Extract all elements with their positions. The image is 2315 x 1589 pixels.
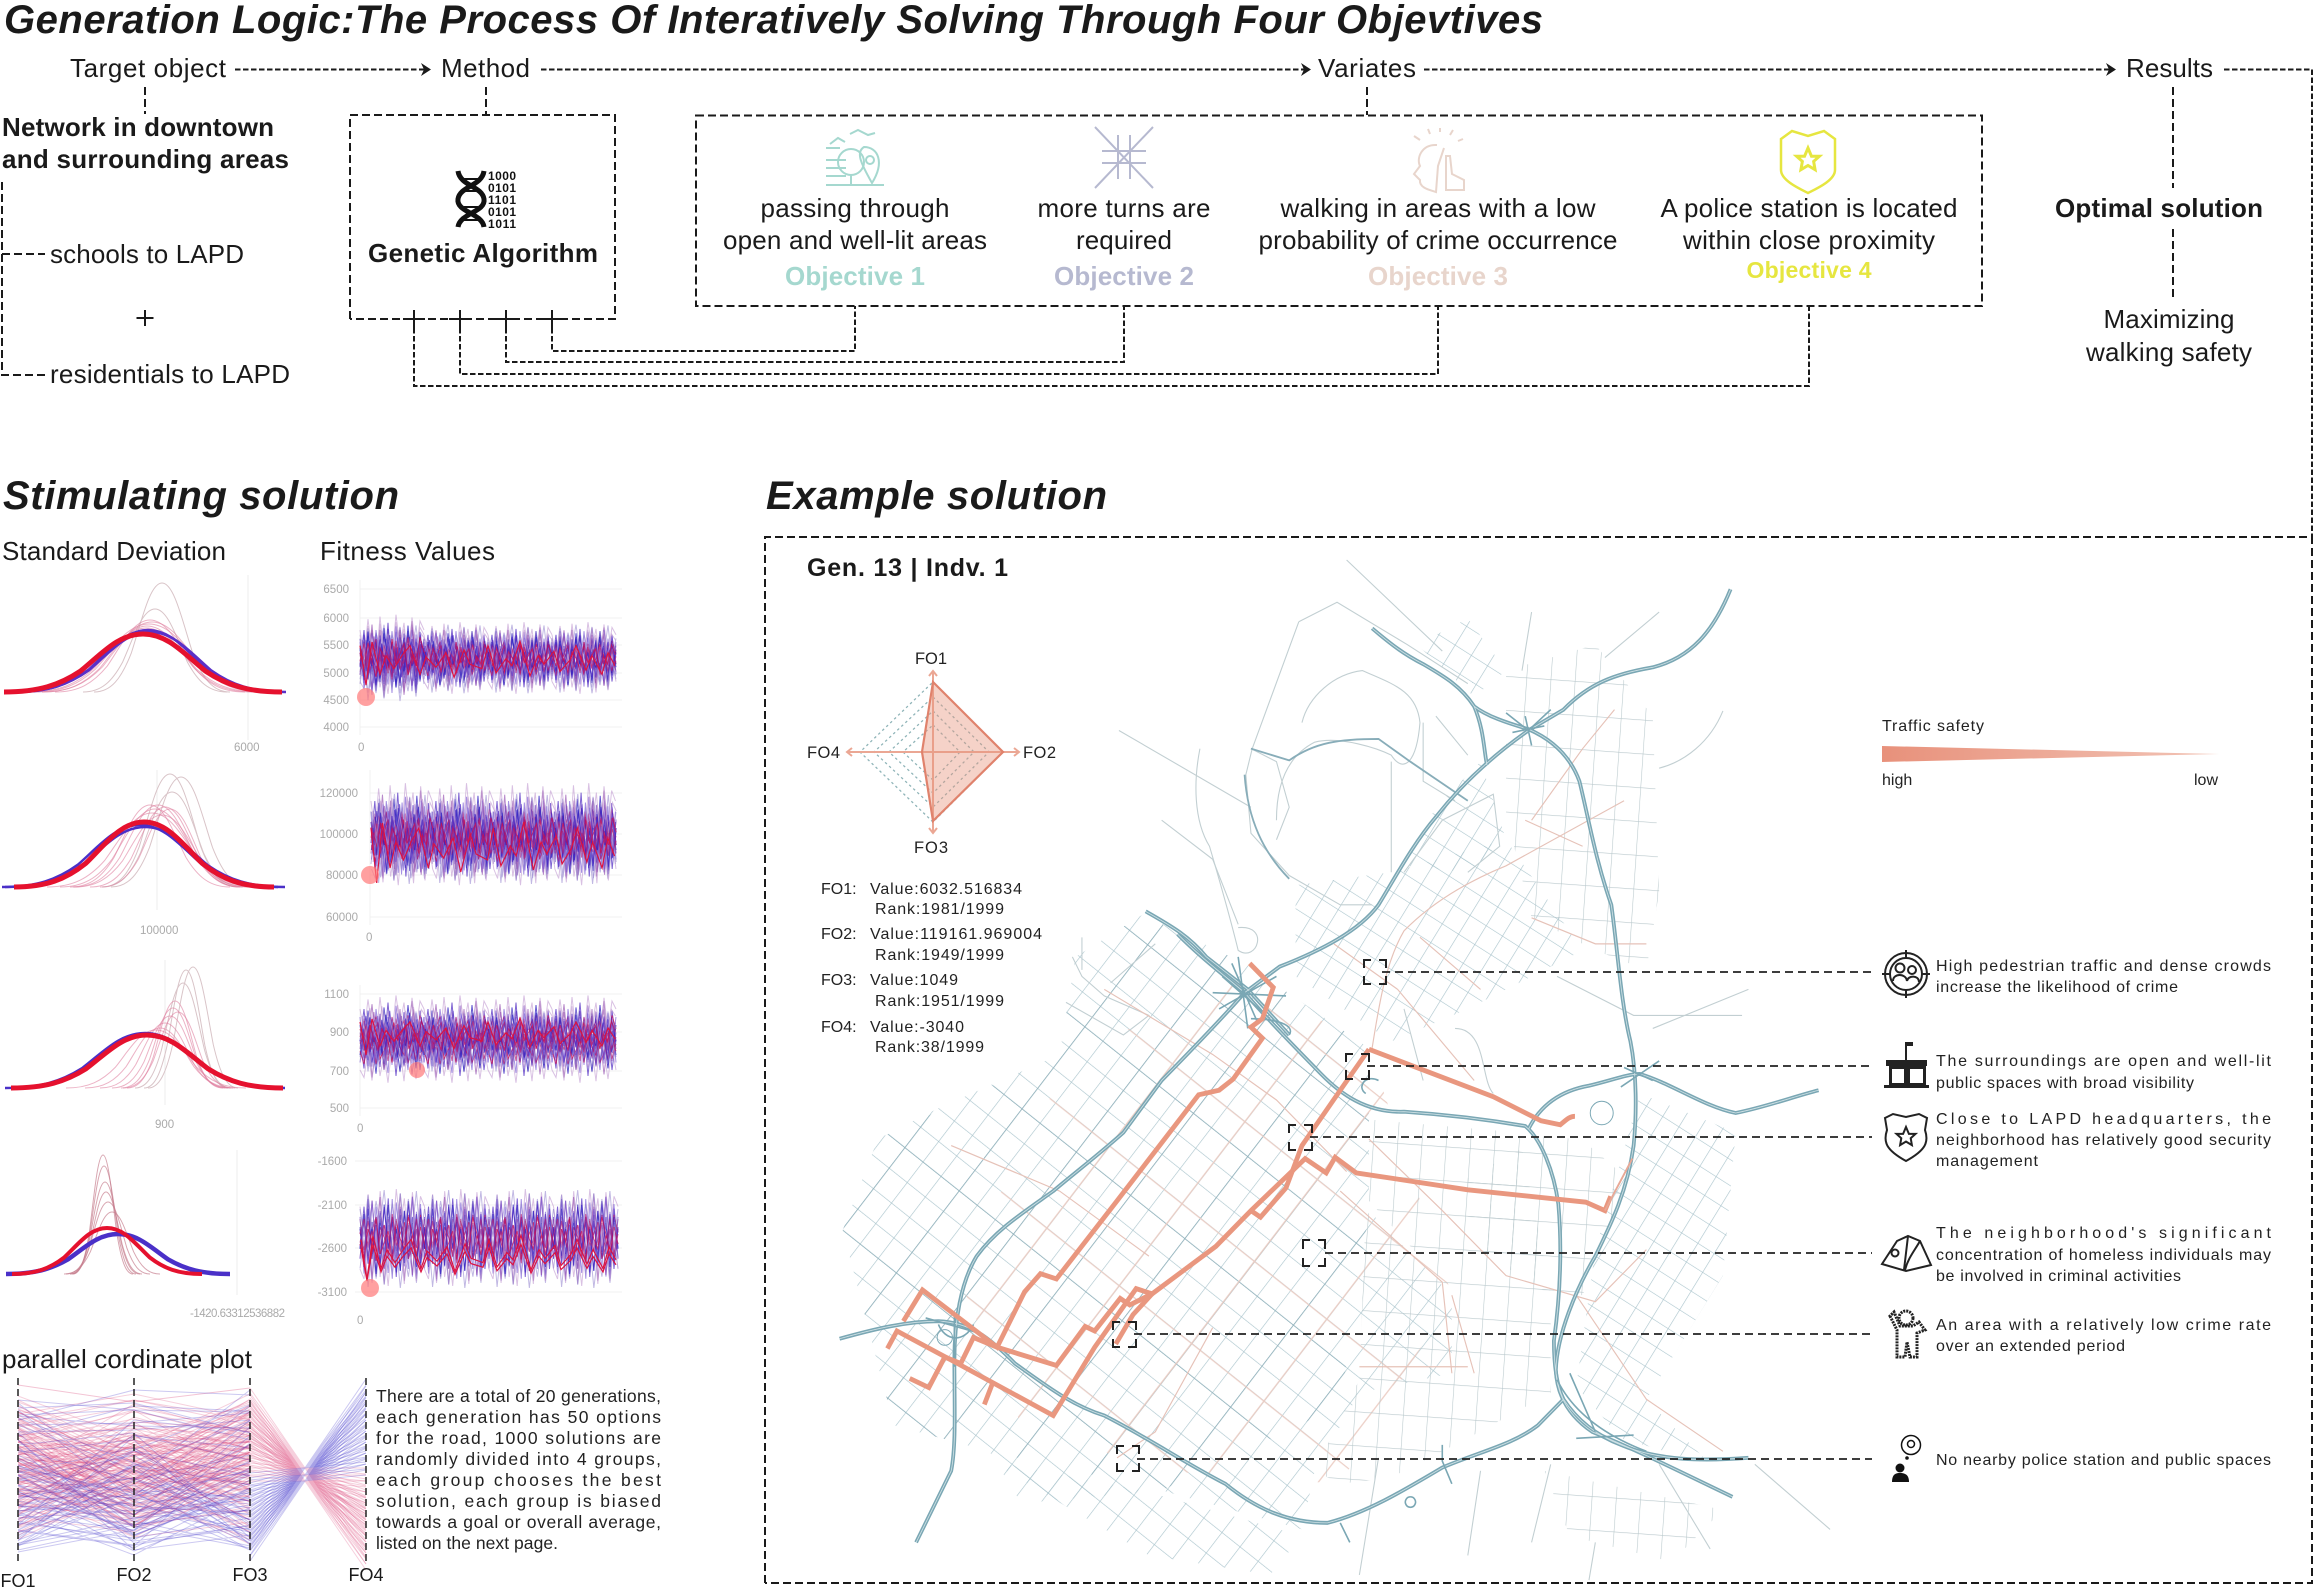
optimal solution: Optimal solution	[2055, 193, 2263, 223]
chart: fitness FO1	[323, 580, 667, 754]
chart: fitness FO3: 900	[330, 1027, 349, 1039]
radar axes	[847, 671, 1019, 833]
radar values: Rank:1949/1999	[875, 947, 1004, 964]
chart: fitness FO1: 0	[358, 742, 364, 754]
chart: fitness FO3: 700	[330, 1066, 349, 1078]
chart: fitness FO1: 4000	[323, 722, 349, 734]
goal text: Maximizing	[2104, 304, 2234, 334]
annotation 6: no police	[1892, 1436, 2271, 1482]
heading: stimulating solution: Stimulating solution	[3, 474, 399, 518]
step label: target object: Target object	[70, 53, 227, 83]
annotation 5: low crime	[1890, 1311, 2271, 1357]
radar chart	[807, 650, 1056, 857]
marker 3	[1289, 1125, 1872, 1150]
marker 6	[1117, 1446, 1872, 1471]
annotation 3: police: management	[1936, 1153, 2039, 1170]
marker 1	[1364, 960, 1872, 984]
radar polygon	[922, 682, 1003, 821]
annotation 1: crowds: High pedestrian traffic and dense crowds	[1936, 958, 2271, 975]
chart: fitness FO2	[320, 770, 667, 944]
chart: standard deviation FO3: 900	[155, 1119, 174, 1131]
objective 2: Objective 2	[1054, 261, 1194, 291]
radar grid	[860, 682, 1003, 822]
radar labels	[807, 650, 1056, 857]
radar values: Rank:1951/1999	[875, 993, 1004, 1010]
subheading: fitness values: Fitness Values	[320, 536, 495, 566]
annotation 4: homeless: concentration of homeless individuals may	[1936, 1247, 2271, 1264]
annotation 3: police: Close to LAPD headquarters, the	[1936, 1111, 2271, 1128]
annotation 4: homeless	[1882, 1225, 2272, 1285]
route: residentials: residentials to LAPD	[50, 359, 290, 389]
text block: generations note	[376, 1386, 661, 1553]
annotation 3: police	[1885, 1111, 2271, 1170]
connectors to objectives	[403, 306, 1809, 386]
objective 1: passing through	[760, 193, 950, 223]
legend: traffic safety	[1882, 718, 2219, 789]
context roads north	[1066, 560, 1830, 1580]
plus sign	[136, 310, 154, 326]
annotation 4: homeless: be involved in criminal activities	[1936, 1268, 2181, 1285]
legend: traffic safety: high	[1882, 772, 1912, 789]
text block: generations note: each group chooses the best	[376, 1470, 661, 1490]
icon: DNA binary	[458, 169, 516, 231]
chart: standard deviation FO1	[4, 575, 286, 754]
radar values: FO4:	[821, 1019, 857, 1036]
objective 1: Objective 1	[785, 261, 925, 291]
result connector line	[2224, 70, 2312, 537]
icon: DNA binary: 1011	[488, 217, 516, 231]
radar values: FO3:	[821, 972, 857, 989]
radar values: Value:119161.969004	[870, 926, 1042, 943]
icon: person waving	[1890, 1311, 1925, 1357]
chart: fitness FO4: -3100	[318, 1287, 347, 1299]
marker 4	[1303, 1240, 1872, 1266]
legend wedge	[1882, 746, 2219, 762]
chart: fitness FO4: 0	[357, 1315, 363, 1327]
goal text: walking safety	[2085, 337, 2252, 367]
icon: police badge	[1885, 1114, 1927, 1161]
annotation 1: crowds	[1882, 950, 2271, 998]
teal park road	[1245, 739, 1468, 879]
callout markers and leaders	[1113, 960, 1872, 1471]
panel: example solution frame	[765, 537, 2312, 1583]
panel: variates objectives	[696, 87, 1982, 306]
heading: parallel coordinate plot: parallel cordinate plot	[2, 1344, 253, 1374]
objective 3	[1258, 128, 1618, 291]
pink secondary roads	[951, 710, 1723, 1458]
radar labels: FO3	[914, 839, 948, 857]
target heading: and surrounding areas	[2, 144, 289, 174]
icon: open park	[826, 130, 884, 185]
radar values: Value:-3040	[870, 1019, 964, 1036]
chart: fitness FO2: 0	[366, 932, 372, 944]
route: schools: schools to LAPD	[50, 239, 244, 269]
chart: fitness FO3: 0	[357, 1123, 363, 1135]
optimal route	[887, 963, 1611, 1416]
solution label: Gen. 13 | Indv. 1	[807, 554, 1008, 582]
radar labels: FO1	[915, 650, 947, 668]
panel: genetic algorithm	[350, 87, 1809, 386]
annotation 2: open space	[1884, 1042, 2272, 1092]
objective 1	[723, 130, 987, 291]
icon: police shield	[1781, 131, 1835, 193]
icon: DNA binary: 1000	[488, 169, 516, 183]
chart: fitness FO4	[318, 1156, 667, 1327]
step label: method: Method	[441, 53, 530, 83]
objective 4: A police station is located	[1660, 193, 1958, 223]
interchange detail	[926, 710, 1659, 1542]
chart: parallel coordinates	[0, 1378, 384, 1589]
target heading	[2, 112, 289, 174]
process flow header	[70, 53, 2213, 83]
objective 3: walking in areas with a low	[1280, 193, 1596, 223]
map	[840, 560, 1830, 1580]
axis labels: FO2	[116, 1565, 152, 1585]
annotation 6: no police: No nearby police station and public spaces	[1936, 1452, 2271, 1469]
annotation 1: crowds: increase the likelihood of crime	[1936, 979, 2178, 996]
annotation 2: open space: public spaces with broad visibility	[1936, 1075, 2194, 1092]
text block: generations note: solution, each group is biased	[376, 1491, 661, 1511]
radar values: Value:1049	[870, 972, 958, 989]
objective 2: more turns are	[1038, 193, 1210, 223]
GA label: Genetic Algorithm	[368, 238, 598, 268]
text block: generations note: each generation has 50 options	[376, 1407, 661, 1427]
chart: standard deviation FO4	[6, 1150, 285, 1320]
freeways	[840, 589, 1819, 1542]
text block: generations note: towards a goal or overall average,	[376, 1512, 661, 1532]
objective 4	[1660, 131, 1958, 283]
objective 4: Objective 4	[1746, 257, 1872, 283]
annotation 2: open space: The surroundings are open and well-lit	[1936, 1053, 2272, 1070]
icon: tent	[1882, 1236, 1931, 1271]
objective 3: Objective 3	[1368, 261, 1508, 291]
annotation 5: low crime: An area with a relatively low crime rate	[1936, 1317, 2271, 1334]
chart: fitness FO1: 4500	[323, 695, 349, 707]
chart: fitness FO3: 500	[330, 1103, 349, 1115]
chart: fitness FO2: 60000	[326, 912, 358, 924]
chart: fitness FO1: 5500	[323, 640, 349, 652]
marker 2	[1346, 1054, 1872, 1079]
chart: fitness FO2: 80000	[326, 870, 358, 882]
chart: fitness FO3	[324, 985, 667, 1135]
chart: fitness FO4: -2100	[318, 1200, 347, 1212]
radar values: FO2:	[821, 926, 857, 943]
annotation 5: low crime: over an extended period	[1936, 1338, 2125, 1355]
arrow: target to method	[235, 63, 431, 76]
icon: public building	[1884, 1042, 1929, 1088]
text block: generations note: listed on the next page.	[376, 1533, 558, 1553]
heading: example solution: Example solution	[766, 474, 1107, 518]
radar values: Value:6032.516834	[870, 881, 1022, 898]
icon: person thinking	[1892, 1436, 1920, 1482]
axis labels: FO3	[232, 1565, 268, 1585]
chart: standard deviation FO3	[5, 960, 285, 1131]
axis labels	[0, 1565, 384, 1589]
panel: target object	[2, 87, 290, 389]
step label: variates: Variates	[1318, 53, 1416, 83]
chart: fitness FO1: 6000	[323, 613, 349, 625]
annotation 4: homeless: The neighborhood's significant	[1936, 1225, 2272, 1242]
legend: traffic safety: Traffic safety	[1882, 718, 1984, 735]
icon: head and hand	[1414, 128, 1464, 192]
step label: results: Results	[2126, 53, 2213, 83]
icon: DNA binary: 0101	[488, 181, 516, 195]
objective 1: open and well-lit areas	[723, 225, 987, 255]
objective 4: within close proximity	[1682, 225, 1935, 255]
marker 5	[1113, 1322, 1872, 1347]
chart: standard deviation FO1: 6000	[234, 742, 260, 754]
chart: fitness FO3: 1100	[324, 989, 349, 1001]
subheading: standard deviation: Standard Deviation	[2, 536, 226, 566]
radar values: Rank:38/1999	[875, 1039, 984, 1056]
goal text	[2085, 304, 2252, 367]
radar values: Rank:1981/1999	[875, 901, 1004, 918]
annotation 3: police: neighborhood has relatively good security	[1936, 1132, 2271, 1149]
axis labels: FO4	[348, 1565, 384, 1585]
street grids	[843, 619, 1736, 1575]
chart: fitness FO4: -1600	[318, 1156, 347, 1168]
chart: fitness FO1: 6500	[323, 584, 349, 596]
text block: generations note: There are a total of 20 generations,	[376, 1386, 661, 1406]
objective 2	[1038, 127, 1210, 291]
chart: fitness FO4: -2600	[318, 1243, 347, 1255]
objective 2: required	[1076, 225, 1172, 255]
legend: traffic safety: low	[2194, 772, 2218, 789]
chart: standard deviation FO4: -1420.63312536882	[190, 1308, 285, 1320]
icon: crowd target	[1882, 950, 1930, 998]
text block: generations note: randomly divided into 4 groups,	[376, 1449, 661, 1469]
icon: crossing lines	[1095, 127, 1153, 188]
chart: fitness FO1: 5000	[323, 668, 349, 680]
arrow: variates to results	[1424, 63, 2116, 76]
icon: DNA binary: 0101	[488, 205, 516, 219]
objective 3: probability of crime occurrence	[1258, 225, 1618, 255]
radar values: FO1:	[821, 881, 857, 898]
target heading: Network in downtown	[2, 112, 274, 142]
radar labels: FO2	[1023, 744, 1056, 762]
arrow: method to variates	[541, 63, 1311, 76]
radar labels: FO4	[807, 744, 840, 762]
text block: generations note: for the road, 1000 solutions are	[376, 1428, 661, 1448]
chart: standard deviation FO2: 100000	[140, 925, 178, 937]
icon: DNA binary: 1101	[488, 193, 516, 207]
panel: results	[2055, 87, 2263, 367]
radar values	[821, 881, 1042, 1056]
chart: fitness FO2: 120000	[320, 788, 358, 800]
chart: standard deviation FO2	[2, 770, 285, 937]
chart: fitness FO2: 100000	[320, 829, 358, 841]
